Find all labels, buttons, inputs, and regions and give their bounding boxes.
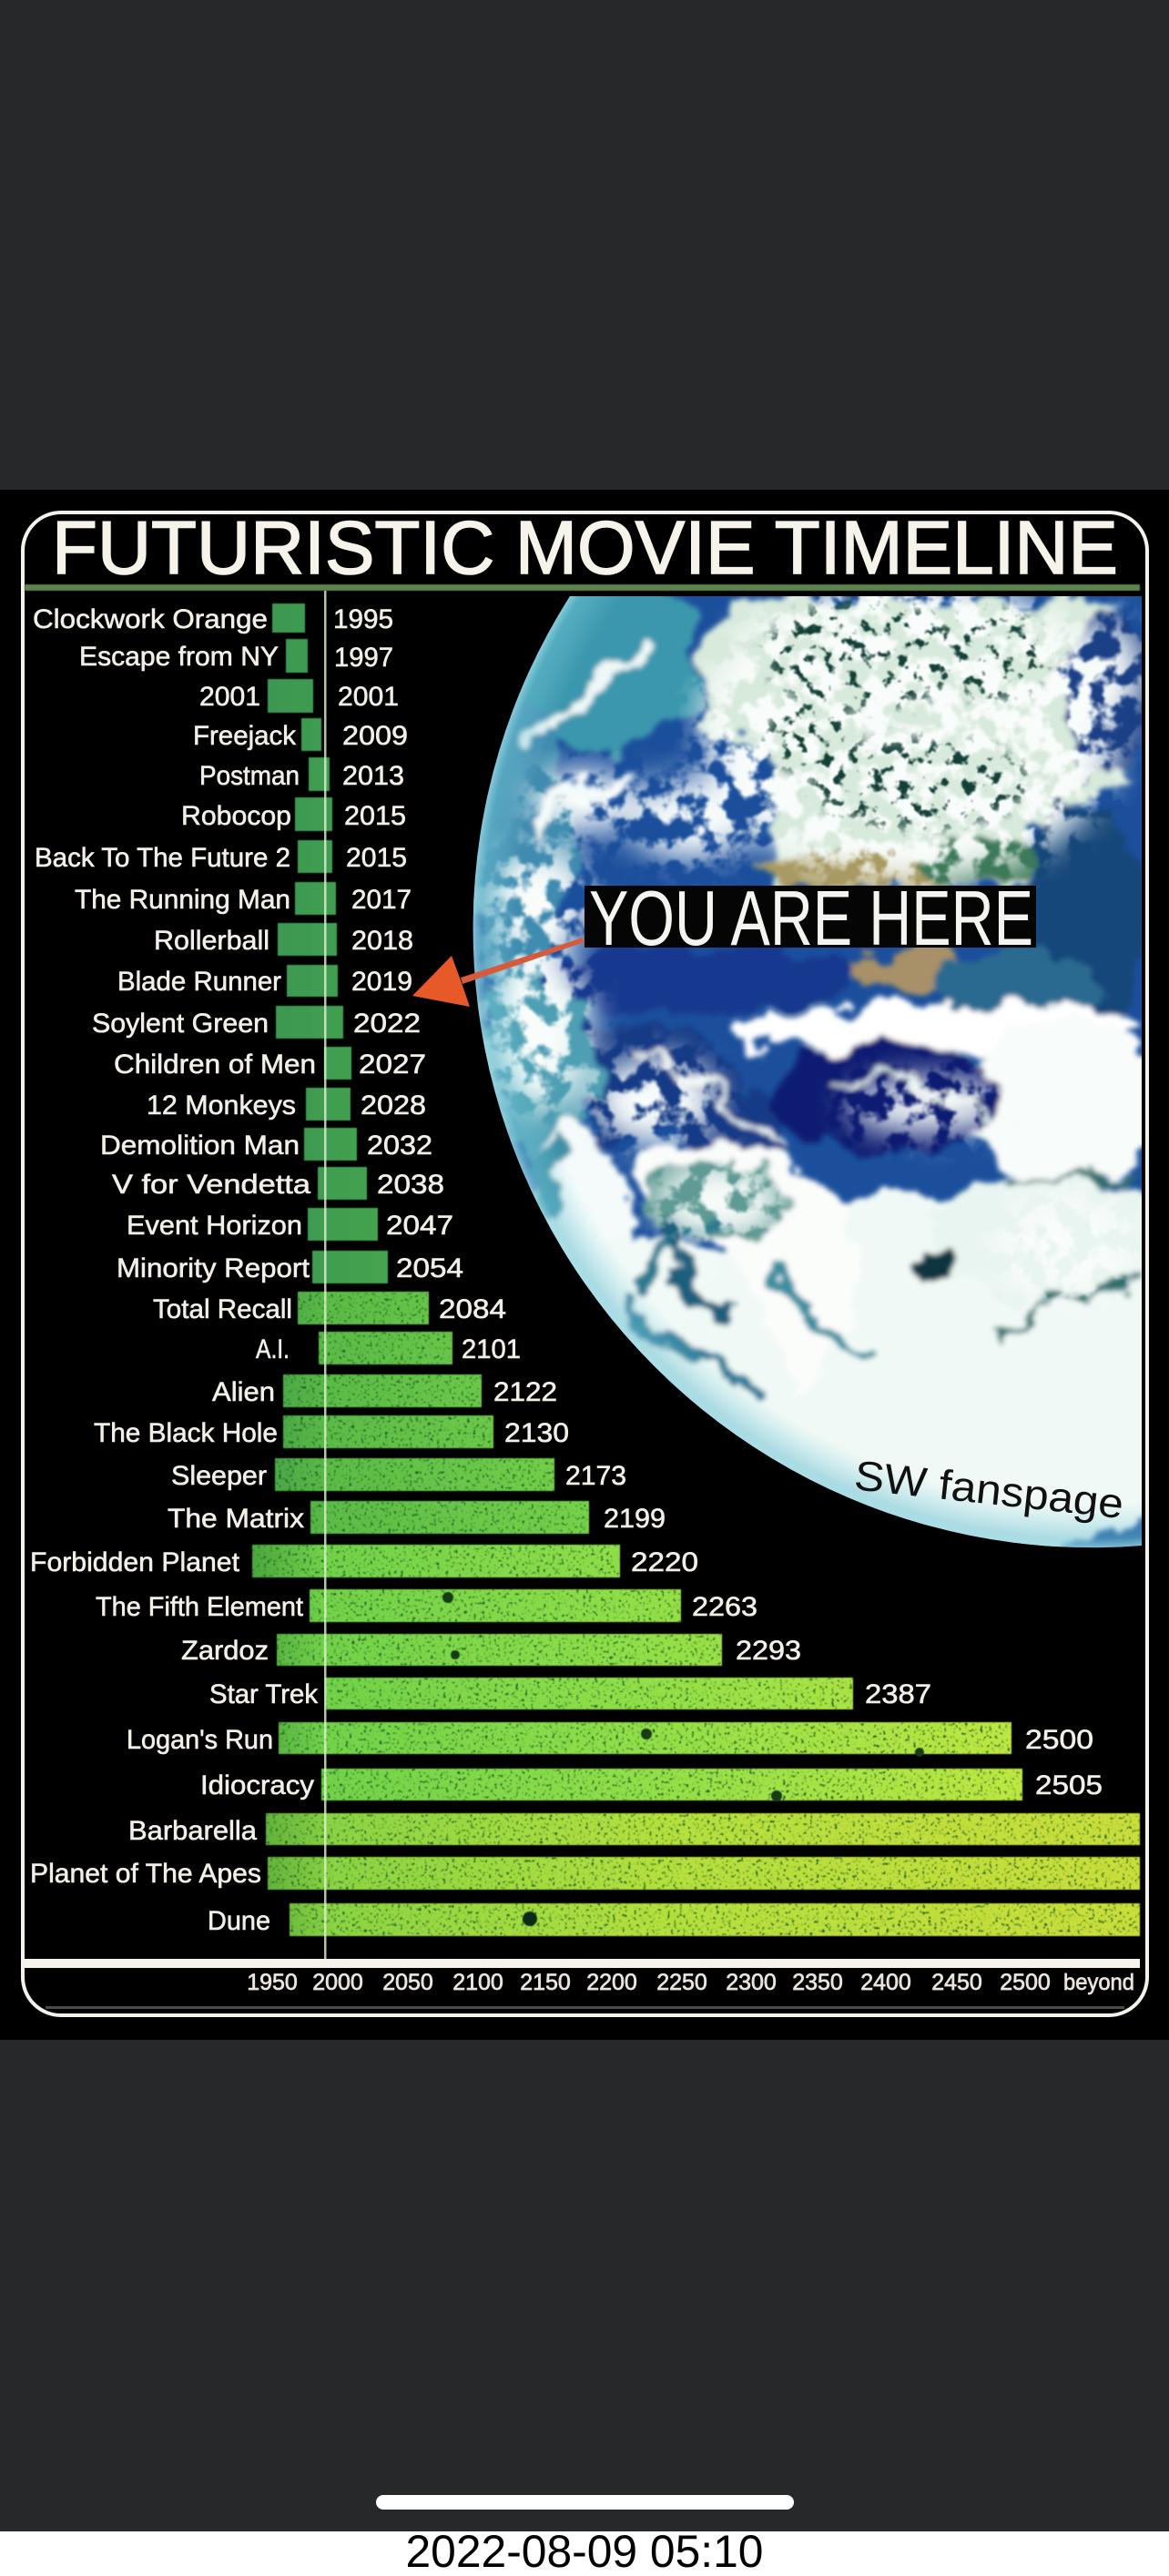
row: A.I.: 2101 xyxy=(462,1334,521,1364)
watermark: SW fanspage xyxy=(852,1451,1126,1527)
row: V for Vendetta: 2038 xyxy=(377,1170,444,1200)
axis labels: 2250 xyxy=(656,1970,707,1995)
axis labels: 2300 xyxy=(726,1970,777,1995)
row: Star Trek: 2387 xyxy=(865,1679,931,1709)
row: Blade Runner: Blade Runner xyxy=(117,967,281,997)
row: Sleeper: 2173 xyxy=(565,1461,626,1491)
row: Sleeper xyxy=(171,1458,626,1491)
row: V for Vendetta xyxy=(112,1167,444,1200)
axis labels: 2450 xyxy=(931,1970,982,1995)
row: The Running Man xyxy=(75,882,412,915)
row: Forbidden Planet: 2220 xyxy=(631,1547,698,1577)
row: 12 Monkeys xyxy=(147,1088,426,1121)
row: Children of Men: Children of Men xyxy=(114,1050,316,1080)
row: Soylent Green: Soylent Green xyxy=(92,1009,269,1039)
row: Forbidden Planet: Forbidden Planet xyxy=(30,1547,240,1577)
row: Clockwork Orange: Clockwork Orange xyxy=(33,604,268,634)
row: Postman: 2013 xyxy=(342,761,404,791)
row: Robocop: Robocop xyxy=(181,801,291,831)
row: Demolition Man: Demolition Man xyxy=(100,1131,300,1161)
row: Escape from NY xyxy=(79,639,393,673)
row: Idiocracy: Idiocracy xyxy=(200,1770,314,1800)
axis labels: 2100 xyxy=(452,1970,503,1995)
row: Children of Men: 2027 xyxy=(359,1050,426,1080)
row: Alien xyxy=(212,1374,557,1407)
row: Robocop xyxy=(181,797,406,831)
row: Idiocracy: 2505 xyxy=(1035,1770,1103,1800)
title underline strip xyxy=(25,584,1140,591)
rounded frame xyxy=(23,512,1147,2015)
row: Idiocracy xyxy=(200,1769,1103,1801)
callout: you are here: YOU ARE HERE xyxy=(589,876,1033,962)
row: A.I.: A.I. xyxy=(256,1334,290,1364)
row: The Matrix xyxy=(168,1501,666,1534)
row: Star Trek: Star Trek xyxy=(209,1679,319,1709)
earth image xyxy=(473,596,1142,1547)
row: Total Recall: 2084 xyxy=(439,1294,506,1324)
row: 12 Monkeys: 2028 xyxy=(361,1090,426,1121)
row: Postman: Postman xyxy=(199,761,300,791)
row: Soylent Green: 2022 xyxy=(353,1009,421,1039)
row: Blade Runner: 2019 xyxy=(351,967,412,997)
row: The Black Hole xyxy=(94,1415,569,1448)
chart rows xyxy=(30,603,1140,1936)
row: Event Horizon: 2047 xyxy=(386,1211,453,1241)
row: Clockwork Orange xyxy=(33,603,393,634)
axis labels: 2500 xyxy=(1000,1970,1051,1995)
row: Zardoz: Zardoz xyxy=(181,1636,269,1666)
row: Total Recall: Total Recall xyxy=(153,1294,292,1324)
row: Alien: 2122 xyxy=(493,1377,557,1407)
row: Event Horizon: Event Horizon xyxy=(127,1211,302,1241)
row: Alien: Alien xyxy=(212,1377,275,1407)
row: Zardoz xyxy=(181,1634,801,1666)
axis labels: 2150 xyxy=(520,1970,571,1995)
timestamp strip: 2022-08-09 05:10 xyxy=(406,2526,763,2576)
axis labels: 2200 xyxy=(586,1970,637,1995)
row: 2001 xyxy=(199,679,399,713)
row: The Matrix: The Matrix xyxy=(168,1504,304,1534)
row: The Fifth Element: The Fifth Element xyxy=(96,1592,304,1622)
frame inner bottom line xyxy=(46,2006,1124,2009)
row: 2001: 2001 xyxy=(199,682,260,712)
row: V for Vendetta: V for Vendetta xyxy=(112,1170,310,1200)
row: Demolition Man: 2032 xyxy=(367,1131,432,1161)
earth white cloud mottling xyxy=(483,573,1143,1302)
row: 2001: 2001 xyxy=(338,682,399,712)
row: Escape from NY: Escape from NY xyxy=(79,642,279,672)
row: Demolition Man xyxy=(100,1128,432,1161)
row: The Running Man: The Running Man xyxy=(75,885,290,915)
row: Soylent Green xyxy=(92,1006,421,1039)
row: The Fifth Element: 2263 xyxy=(692,1592,757,1622)
row: Freejack: Freejack xyxy=(193,721,297,751)
row: Star Trek xyxy=(209,1678,931,1709)
timestamp strip xyxy=(0,2526,1169,2576)
row: Rollerball: 2018 xyxy=(351,926,413,956)
axis labels xyxy=(247,1970,1134,1995)
row: Freejack xyxy=(193,718,408,751)
row: Zardoz: 2293 xyxy=(736,1636,801,1666)
row: The Black Hole: The Black Hole xyxy=(94,1418,278,1448)
row: Barbarella xyxy=(128,1813,1140,1846)
axis labels: 2050 xyxy=(382,1970,433,1995)
row: Total Recall xyxy=(153,1292,506,1324)
earth dark land specks xyxy=(765,601,1047,828)
row: Forbidden Planet xyxy=(30,1545,698,1577)
row: Minority Report xyxy=(117,1251,463,1283)
row: Logan's Run: 2500 xyxy=(1025,1725,1093,1755)
row: Barbarella: Barbarella xyxy=(128,1816,257,1846)
row: Logan's Run: Logan's Run xyxy=(127,1725,273,1755)
axis labels: 2400 xyxy=(860,1970,911,1995)
row: Clockwork Orange: 1995 xyxy=(333,604,393,634)
row: 12 Monkeys: 12 Monkeys xyxy=(147,1090,296,1121)
row: Minority Report: Minority Report xyxy=(117,1253,310,1283)
axis labels: 1950 xyxy=(247,1970,298,1995)
row: Postman xyxy=(199,757,404,791)
axis labels: 2350 xyxy=(792,1970,843,1995)
axis baseline xyxy=(25,1959,1140,1968)
row: Back To The Future 2: Back To The Future 2 xyxy=(35,843,290,873)
row: Rollerball: Rollerball xyxy=(154,926,269,956)
row: Minority Report: 2054 xyxy=(396,1253,463,1283)
year 2000 marker line xyxy=(324,591,326,1959)
arrow: you are here xyxy=(412,938,584,1007)
poster panel xyxy=(0,490,1169,2040)
row: The Black Hole: 2130 xyxy=(504,1418,569,1448)
row: Freejack: 2009 xyxy=(342,721,408,751)
row: The Fifth Element xyxy=(96,1589,757,1622)
axis labels: beyond xyxy=(1063,1970,1134,1995)
row: Dune: Dune xyxy=(208,1906,270,1936)
row: Escape from NY: 1997 xyxy=(334,643,393,673)
row: Event Horizon xyxy=(127,1208,453,1241)
row: The Matrix: 2199 xyxy=(604,1504,666,1534)
row: Planet of The Apes xyxy=(30,1857,1140,1890)
row: Logan's Run xyxy=(127,1722,1093,1757)
row: A.I. xyxy=(256,1332,521,1364)
row: Planet of The Apes: Planet of The Apes xyxy=(30,1859,261,1889)
home indicator bar xyxy=(376,2495,794,2510)
row: Rollerball xyxy=(154,923,413,956)
row: Back To The Future 2 xyxy=(35,840,407,873)
row: Back To The Future 2: 2015 xyxy=(346,843,407,873)
row: Robocop: 2015 xyxy=(344,801,406,831)
row: Sleeper: Sleeper xyxy=(171,1461,267,1491)
row: Children of Men xyxy=(114,1047,426,1080)
row: Blade Runner xyxy=(117,965,412,997)
title: FUTURISTIC MOVIE TIMELINE xyxy=(52,505,1118,590)
axis labels: 2000 xyxy=(312,1970,363,1995)
row: The Running Man: 2017 xyxy=(351,885,412,915)
row: Dune xyxy=(208,1903,1140,1936)
